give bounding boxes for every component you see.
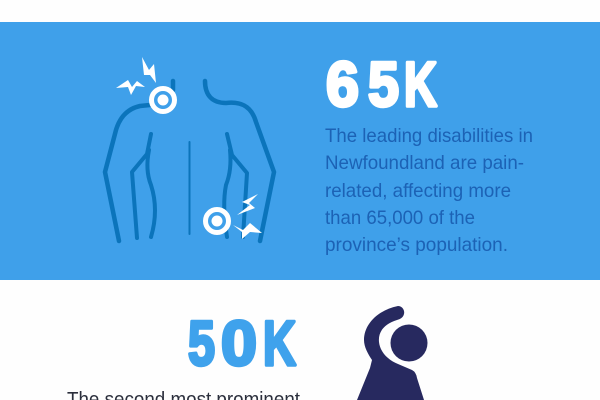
icon: shoulder pain target [116,57,174,112]
heading: 50K [188,309,296,379]
text block: description of pain-related disabilities: province’s population. [325,234,508,256]
icon: back of torso with pain points [105,57,274,241]
text block: description of pain-related disabilities: related, affecting more [325,180,511,202]
heading: 65K: 5 [368,50,399,120]
heading: 65K: 6 [326,50,359,120]
icon: person stretching [357,306,428,400]
icon: lower back pain target [206,194,262,239]
heading: 50K: 5 [188,309,215,379]
text block: description of pain-related disabilities: than 65,000 of the [325,207,475,229]
text block: description of pain-related disabilities: Newfoundland are pain- [325,152,524,174]
heading: 50K: 0 [221,309,257,379]
text block: description of pain-related disabilities: The leading disabilities in [325,125,533,147]
panel: 65K pain-related disabilities [0,22,600,280]
heading: 65K: K [404,50,437,120]
heading: 65K [326,50,437,120]
text block: description of pain-related disabilities [325,125,533,256]
heading: 50K: K [263,309,296,379]
